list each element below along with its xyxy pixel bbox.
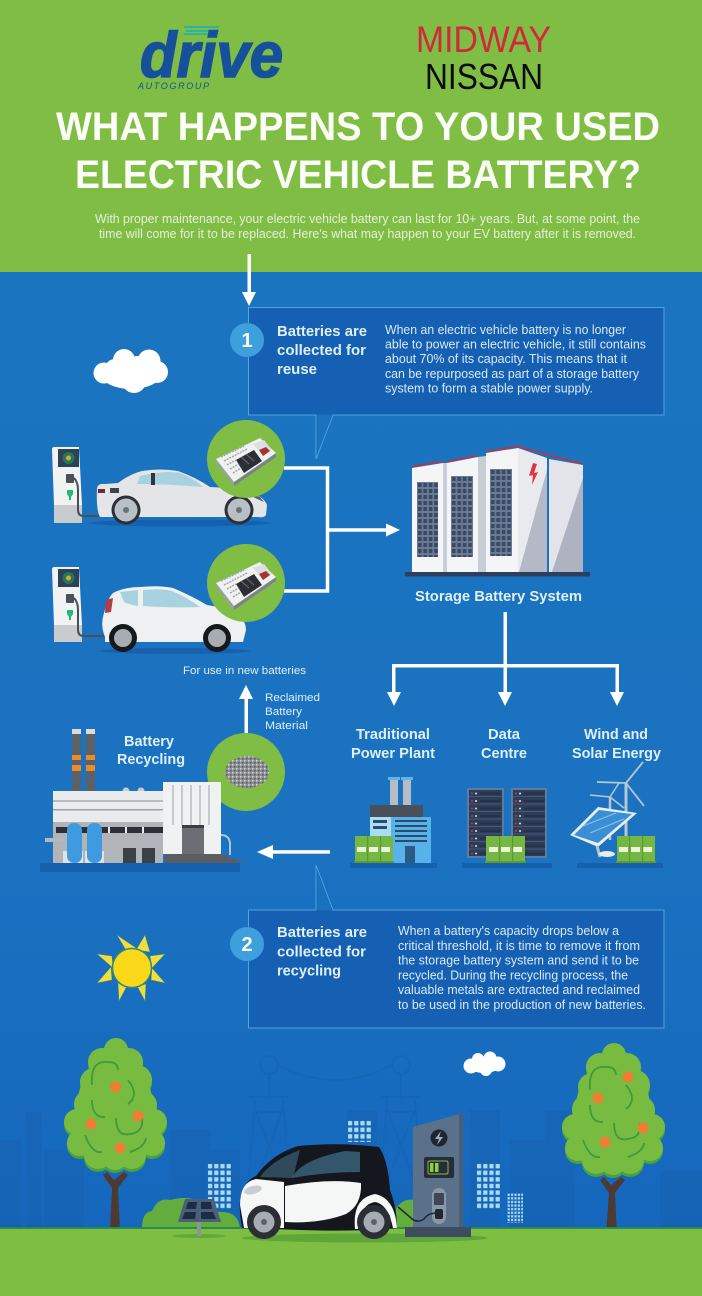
icon: charging station 1: [52, 447, 110, 523]
icon: charging station 2: [52, 567, 114, 642]
icon: wind and solar: [570, 762, 663, 868]
badge: number 2: [230, 927, 264, 961]
label: data centre: Data: [488, 726, 521, 743]
text: for use in new batteries: For use in new batteries: [183, 665, 307, 677]
text: reclaimed battery material: Reclaimed: [265, 692, 320, 704]
intro text: [95, 211, 640, 241]
step 2 heading: [277, 924, 367, 980]
label: traditional power plant: Traditional: [356, 726, 430, 743]
label: traditional power plant: [351, 726, 435, 762]
step 2 heading: recycling: [277, 962, 341, 980]
panel: step 2 callout: [230, 865, 664, 1028]
step 1 heading: collected for: [277, 342, 366, 359]
battery circle 2: [207, 544, 285, 622]
icon: right tree: [562, 1043, 665, 1235]
intro text: With proper maintenance, your electric vehicle battery can last for 10+ years. But, at some point, the: [95, 211, 640, 226]
step 1 body text: system to form a stable power supply.: [385, 382, 593, 396]
icon: small solar panel: [172, 1199, 226, 1238]
icon: white sedan: [90, 470, 270, 526]
connector lines: storage to uses: [387, 612, 624, 706]
step 1 body text: [385, 323, 646, 396]
icon: storage battery system: [405, 446, 590, 576]
icon: left tree: [64, 1038, 167, 1230]
arrow: reclaimed material up: [239, 685, 253, 733]
ground: [0, 1227, 702, 1296]
step 2 body text: When a battery's capacity drops below a: [398, 924, 619, 938]
panel: green header: [0, 0, 702, 272]
step 1 heading: Batteries are: [277, 323, 367, 340]
battery circle 1: [207, 420, 285, 498]
label: battery recycling: Recycling: [117, 751, 185, 768]
text: reclaimed battery material: Battery: [265, 706, 303, 718]
buildings with lit windows: [207, 1120, 523, 1223]
badge: number 1: [230, 323, 264, 357]
cloud: small: [464, 1052, 506, 1076]
label: traditional power plant: Power Plant: [351, 745, 435, 762]
step 1 body text: can be repurposed as part of a storage battery: [385, 367, 640, 381]
icon: white hatchback: [100, 586, 250, 654]
icon: sun: [97, 935, 165, 1001]
label: battery recycling: Battery: [124, 733, 175, 750]
step 2 body text: recycled. During the recycling process, the: [398, 968, 628, 982]
step 2 heading: Batteries are: [277, 924, 367, 941]
arrow: into step 1: [242, 254, 256, 306]
icon: smart car: [240, 1144, 397, 1239]
icon: power plant: [350, 777, 437, 868]
label: data centre: Centre: [481, 745, 527, 762]
label: wind and solar energy: Solar Energy: [572, 745, 662, 762]
step 1 heading: reuse: [277, 361, 317, 378]
bushes: [142, 1198, 414, 1228]
label: wind and solar energy: Wind and: [584, 726, 648, 743]
background: faint city skyline and pylons: [0, 1056, 702, 1228]
step 2 heading: collected for: [277, 944, 366, 960]
title: [56, 105, 660, 197]
step 1 body text: able to power an electric vehicle, it still contains: [385, 338, 646, 352]
green battery units: [354, 836, 394, 863]
badge: number 1: 1: [241, 330, 253, 352]
connector lines: cars to storage: [284, 468, 400, 591]
panel: step 1 callout: [230, 308, 664, 459]
step 2 body text: critical threshold, it is time to remove it from: [398, 939, 640, 953]
icon: data centre: [462, 788, 552, 868]
text: reclaimed battery material: Material: [265, 720, 308, 732]
badge: number 2: 2: [241, 934, 253, 956]
label: wind and solar energy: [572, 726, 662, 762]
icon: charging post: [242, 1113, 488, 1242]
step 2 body text: the storage battery system and send it to be: [398, 954, 639, 968]
label: storage battery system: Storage Battery System: [415, 588, 582, 605]
background: blue sky: [0, 272, 702, 1232]
step 1 body text: When an electric vehicle battery is no longer: [385, 323, 626, 337]
label: battery recycling: [117, 733, 185, 768]
arrow: to recycling: [257, 845, 330, 859]
label: data centre: [481, 726, 527, 762]
intro text: time will come for it to be replaced. Here's what may happen to your EV battery after it is removed.: [99, 226, 636, 241]
logo: drive autogroup: drive: [140, 19, 283, 91]
text: reclaimed battery material: [265, 692, 320, 732]
green battery units: [485, 836, 526, 863]
step 1 heading: [277, 323, 367, 378]
title: WHAT HAPPENS TO YOUR USED: [56, 105, 660, 149]
logo: midway nissan: MIDWAY: [416, 19, 551, 60]
logo: midway nissan: NISSAN: [425, 56, 543, 97]
step 1 body text: about 70% of its capacity. This means that it: [385, 352, 628, 366]
title: ELECTRIC VEHICLE BATTERY?: [75, 153, 641, 197]
cloud: upper left: [94, 349, 168, 393]
logo: midway nissan: [416, 19, 551, 97]
step 2 body text: to be used in the production of new batteries.: [398, 998, 646, 1012]
green battery units: [616, 836, 656, 863]
circle: reclaimed material: [207, 733, 285, 811]
logo: drive autogroup: AUTOGROUP: [137, 81, 209, 91]
icon: recycling factory: [40, 729, 243, 872]
step 2 body text: valuable metals are extracted and reclaimed: [398, 983, 640, 997]
step 2 body text: [398, 924, 646, 1012]
